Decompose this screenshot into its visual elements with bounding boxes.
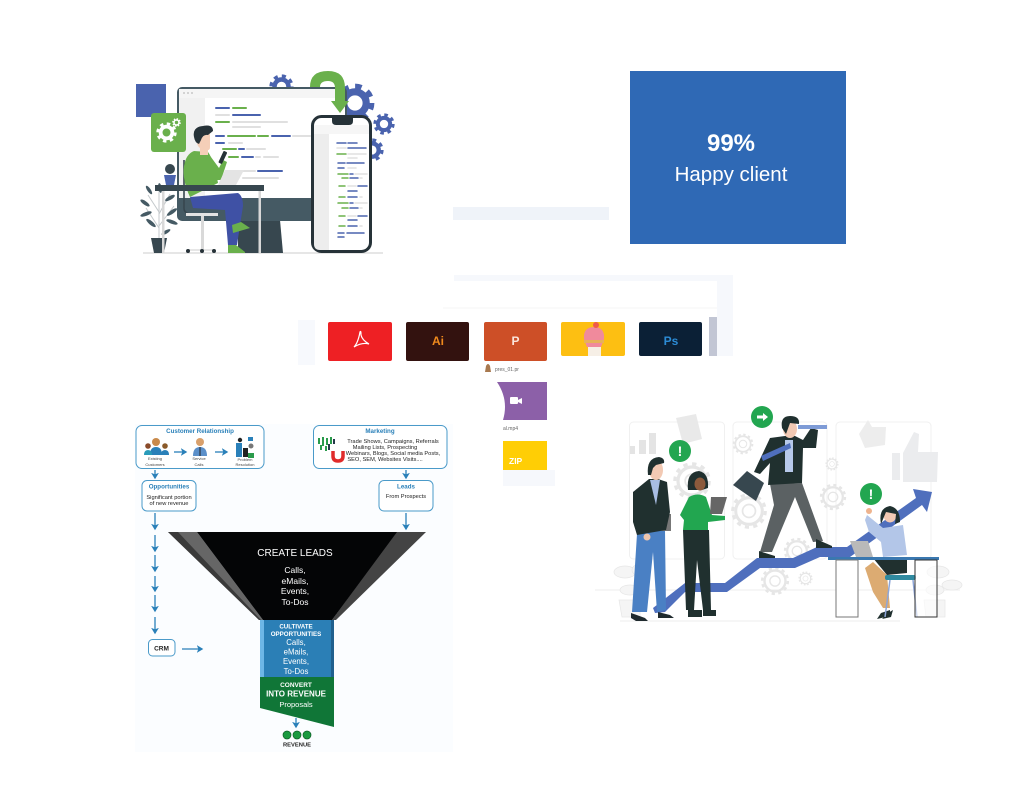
box: CRM: CRM	[154, 646, 169, 652]
chair base	[186, 213, 218, 253]
box: marketing	[314, 426, 447, 468]
left sidebar strip	[298, 320, 315, 365]
arrow: funnel to revenue	[295, 718, 297, 727]
file tile: PowerPoint: P	[511, 334, 520, 348]
icon: customers: Existing	[148, 456, 162, 461]
file tile: PowerPoint	[484, 322, 547, 361]
arrow: leads to funnel	[405, 513, 407, 529]
icon: revenue coins	[283, 731, 311, 739]
icon: desk vase	[164, 164, 176, 185]
funnel: cultivate stage	[260, 620, 334, 677]
box: opportunities: Opportunities	[149, 484, 190, 490]
phone	[312, 116, 370, 252]
file name label	[485, 364, 519, 373]
laptop	[202, 170, 244, 185]
bar chart icon	[630, 433, 656, 454]
code lines on monitor	[216, 108, 310, 178]
box: CRM	[148, 640, 175, 656]
person: man with spyglass and briefcase	[733, 416, 832, 558]
icon: service agent: Calls	[195, 462, 203, 467]
document icon	[676, 414, 702, 444]
icon: magnet with people	[319, 437, 343, 461]
icon: problem resolution	[236, 437, 254, 467]
funnel: cultivate stage: Calls,	[286, 638, 306, 647]
diagram background	[135, 424, 453, 752]
icon: green settings tile	[151, 113, 186, 152]
file tile: Photoshop	[639, 322, 702, 356]
file tile: Illustrator	[406, 322, 469, 361]
funnel: create leads stage	[168, 532, 426, 620]
box: customer relationship: Customer Relationship	[166, 428, 234, 435]
box: opportunities: Significant portion	[146, 495, 192, 501]
person: man with folder	[631, 457, 674, 621]
icon: service agent: Service	[192, 456, 206, 461]
box: opportunities	[142, 480, 196, 511]
funnel: cultivate stage: Events,	[283, 657, 309, 666]
illustration: team climbing growth arrow	[595, 406, 962, 621]
browser frame	[454, 275, 733, 360]
arrow: marketing to leads	[405, 470, 407, 478]
funnel: convert stage: INTO REVENUE	[266, 690, 327, 698]
icon: customers	[144, 438, 169, 467]
file tile: ZIP	[503, 441, 547, 470]
icon: problem resolution: Problem	[238, 457, 253, 462]
icon: arrow bubble top	[751, 406, 773, 428]
file tile: ZIP: ZIP	[509, 456, 523, 466]
box: leads	[379, 480, 433, 511]
icon: problem resolution: Resolution	[236, 462, 254, 467]
icon: alert bubble left	[669, 440, 691, 462]
file name label: pres_01.pr	[495, 367, 519, 373]
file tile: Illustrator: Ai	[432, 334, 444, 348]
panel: faded file browser	[298, 207, 755, 506]
funnel: create leads stage: CREATE LEADS	[257, 548, 333, 559]
desk	[828, 557, 939, 617]
background panels	[630, 422, 931, 559]
file tile: photo	[561, 322, 625, 356]
box: leads: Leads	[397, 484, 415, 490]
plants	[614, 564, 962, 617]
funnel: convert stage	[260, 677, 334, 727]
funnel: cultivate stage: To-Dos	[284, 667, 308, 676]
arrow: customer to opportunities	[154, 470, 156, 478]
icon: blue square	[136, 84, 166, 117]
funnel: convert stage: CONVERT	[280, 682, 312, 689]
icon: alert bubble right: !	[869, 486, 873, 502]
desk	[155, 185, 264, 253]
icon: alert bubble left: !	[678, 443, 682, 459]
box: marketing: SEO, SEM, Websites Visits....	[347, 457, 423, 463]
icon: blue gears behind screens	[271, 76, 393, 160]
icon: customers: Customers	[145, 462, 165, 467]
white cover panel	[555, 356, 755, 506]
arrows: left column	[154, 513, 156, 633]
arrow: CRM to funnel	[182, 648, 202, 650]
code lines on phone	[337, 143, 367, 237]
icon: potted plant	[139, 183, 178, 253]
file tile: PDF	[328, 322, 392, 361]
file name label: al.mp4	[503, 426, 518, 432]
person: woman with tablet	[680, 471, 727, 617]
funnel: create leads stage: eMails,	[282, 576, 308, 586]
scrollbar	[709, 317, 717, 356]
funnel: convert stage: Proposals	[279, 700, 313, 709]
arrow	[174, 451, 186, 453]
box: marketing: Webinars, Blogs, Social media Posts,	[346, 451, 441, 457]
stat value: 99%	[707, 130, 755, 157]
stat label: Happy client	[675, 163, 788, 186]
floor line	[143, 252, 383, 254]
background gears	[675, 435, 845, 594]
file tile: Photoshop: Ps	[664, 334, 679, 348]
revenue label: REVENUE	[283, 742, 311, 748]
ground lines	[595, 590, 960, 621]
icon: large thumbs up	[892, 432, 938, 482]
box: customer relationship	[136, 426, 264, 468]
icon: small thumbs up	[859, 420, 886, 448]
illustration: developer with monitor and phone	[136, 71, 393, 253]
funnel diagram	[135, 424, 453, 752]
stat card: happy client	[630, 71, 846, 244]
funnel: create leads stage: Calls,	[284, 565, 306, 575]
icon: alert bubble right	[860, 483, 882, 505]
chair	[184, 160, 192, 214]
icon: service agent	[192, 438, 207, 467]
funnel: cultivate stage: CULTIVATE	[279, 624, 313, 630]
arrow	[215, 451, 227, 453]
box: opportunities: of new revenue	[150, 501, 188, 507]
funnel: create leads stage: Events,	[281, 586, 309, 596]
laptop	[850, 541, 873, 557]
box: leads: From Prospects	[386, 494, 426, 500]
arrow: green curved arrow into phone	[310, 71, 349, 113]
box: marketing: Marketing	[365, 428, 395, 435]
header divider	[443, 307, 717, 309]
funnel: create leads stage: To-Dos	[282, 597, 308, 607]
top grey bar	[453, 207, 609, 220]
box: marketing: Trade Shows, Campaigns, Referrals	[347, 439, 439, 445]
file tile: video	[497, 382, 547, 420]
person: developer	[184, 126, 250, 253]
funnel: cultivate stage: eMails,	[284, 648, 308, 656]
person: woman at desk	[865, 506, 917, 619]
box: marketing: Mailing Lists, Prospecting	[353, 445, 417, 451]
lower strip	[503, 470, 555, 486]
monitor	[177, 87, 347, 253]
growth arrow	[653, 489, 932, 613]
funnel: cultivate stage: OPPORTUNITIES	[271, 631, 321, 638]
